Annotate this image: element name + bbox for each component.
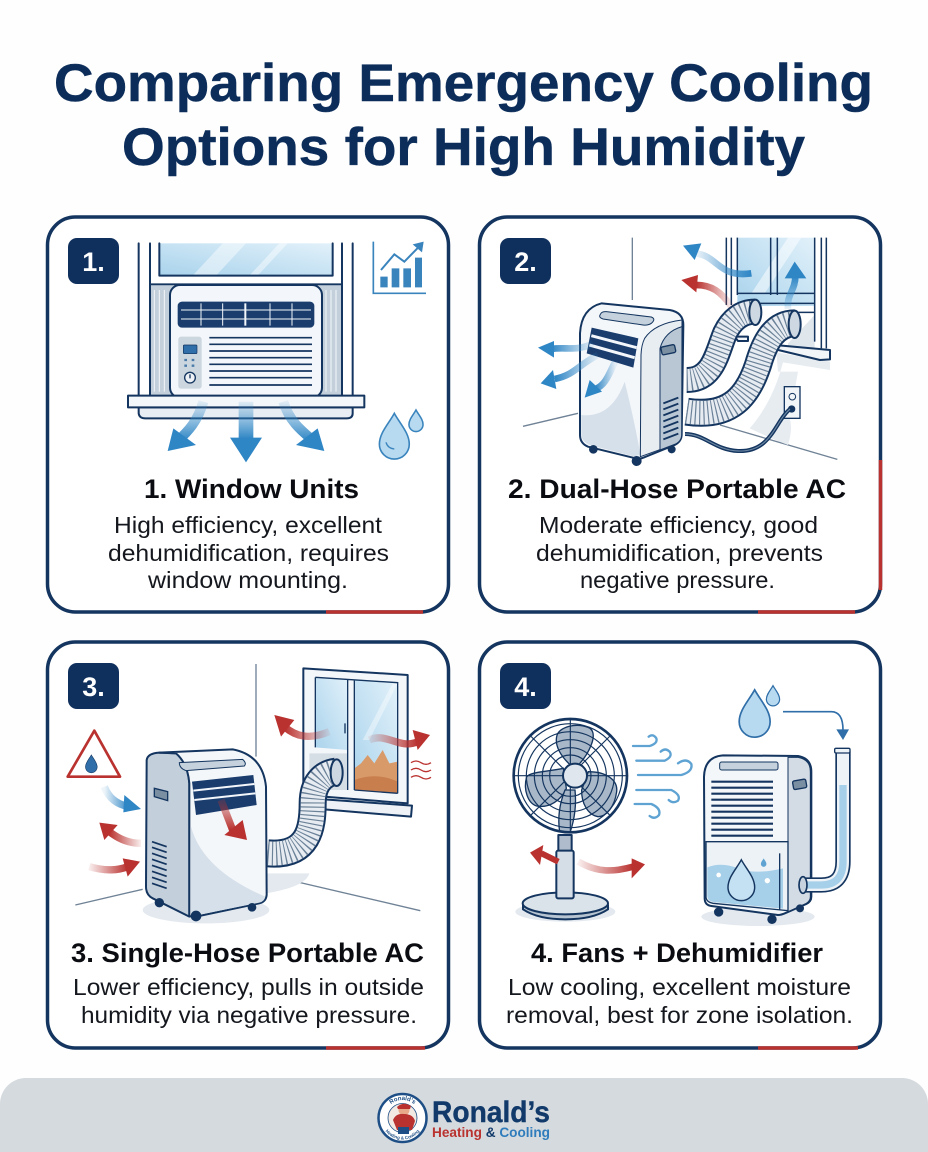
description: window mounting. bbox=[147, 567, 348, 593]
number badge 2 bbox=[500, 238, 551, 284]
oscillation arrows bbox=[530, 845, 645, 878]
heading: 2. Dual-Hose Portable AC bbox=[508, 474, 846, 504]
description: removal, best for zone isolation. bbox=[506, 1002, 853, 1028]
description: humidity via negative pressure. bbox=[81, 1002, 417, 1028]
card frame bbox=[480, 217, 880, 612]
icon: humidity warning bbox=[68, 731, 120, 777]
number badge 2: 2. bbox=[514, 247, 537, 277]
logo badge: Heating & Cooling bbox=[386, 1129, 420, 1140]
description: Low cooling, excellent moisture bbox=[508, 974, 851, 1000]
number badge 4 bbox=[500, 663, 551, 709]
body bbox=[701, 755, 815, 926]
outlet and cord bbox=[685, 387, 800, 451]
heading: 3. Single-Hose Portable AC bbox=[71, 938, 424, 968]
illustration: dehumidifier bbox=[701, 686, 850, 926]
wind lines bbox=[633, 735, 692, 818]
logo wordmark: Ronald’s bbox=[432, 1096, 550, 1129]
unit body bbox=[580, 303, 683, 466]
description bbox=[108, 512, 389, 593]
front hose bbox=[687, 311, 801, 413]
fan blades bbox=[525, 725, 617, 832]
top vent bbox=[178, 302, 314, 328]
arrows: cold air down bbox=[168, 402, 324, 462]
footer bar bbox=[0, 1078, 928, 1152]
card frame bbox=[48, 217, 448, 612]
panel: dual-hose portable AC bbox=[480, 217, 880, 612]
heat waves bbox=[411, 761, 431, 779]
card frame bbox=[48, 642, 448, 1048]
arrows: airflow bbox=[551, 253, 795, 389]
fan stand bbox=[515, 835, 615, 922]
back hose bbox=[687, 300, 761, 380]
title: Options for High Humidity bbox=[122, 118, 806, 177]
control panel bbox=[178, 337, 202, 389]
heading: 4. Fans + Dehumidifier bbox=[531, 938, 823, 968]
window bbox=[726, 238, 830, 360]
number badge 3 bbox=[68, 663, 119, 709]
number badge 3: 3. bbox=[82, 672, 105, 702]
description: dehumidification, requires bbox=[108, 540, 389, 566]
number badge 1 bbox=[68, 238, 119, 284]
fan hub bbox=[563, 764, 587, 788]
card frame bbox=[480, 642, 880, 1048]
arrows: airflow bbox=[89, 727, 418, 870]
icon: water drops bbox=[379, 410, 423, 459]
sill bbox=[128, 396, 364, 418]
panel: fans plus dehumidifier bbox=[480, 642, 880, 1048]
description: High efficiency, excellent bbox=[114, 512, 382, 538]
unit body bbox=[143, 749, 309, 923]
number badge 4: 4. bbox=[514, 672, 537, 702]
front grill bbox=[209, 338, 312, 385]
number badge 1: 1. bbox=[82, 247, 105, 277]
illustration: pedestal fan bbox=[513, 718, 692, 922]
illustration: window unit air conditioner bbox=[128, 243, 364, 462]
title bbox=[54, 54, 873, 177]
panel: window units bbox=[48, 217, 448, 612]
description: Lower efficiency, pulls in outside bbox=[73, 974, 424, 1000]
drain tube bbox=[799, 748, 850, 893]
description bbox=[536, 512, 823, 593]
logo badge bbox=[377, 1092, 428, 1144]
description: dehumidification, prevents bbox=[536, 540, 823, 566]
panel: single-hose portable AC bbox=[48, 642, 448, 1048]
icon: water drops with drain arrow bbox=[739, 686, 849, 740]
heading: 1. Window Units bbox=[144, 474, 359, 504]
description bbox=[506, 974, 853, 1028]
description: negative pressure. bbox=[580, 567, 775, 593]
logo badge: Ronald's bbox=[389, 1096, 416, 1104]
window frame and glass bbox=[139, 243, 353, 397]
icon: efficiency chart bbox=[373, 242, 426, 293]
wall and floor lines bbox=[75, 664, 420, 911]
unit body bbox=[170, 285, 322, 398]
window with hot outdoor view bbox=[303, 668, 412, 817]
logo wordmark: Heating & Cooling bbox=[432, 1124, 550, 1140]
illustration: single-hose unit bbox=[68, 664, 431, 923]
illustration: dual-hose unit bbox=[523, 238, 837, 466]
hose bbox=[268, 759, 343, 854]
fan cage bbox=[513, 718, 628, 833]
wall and floor lines bbox=[523, 238, 837, 459]
water tank bbox=[706, 842, 788, 911]
hose and sill shadow bbox=[750, 352, 830, 445]
description: Moderate efficiency, good bbox=[539, 512, 818, 538]
wheels bbox=[714, 904, 804, 924]
title: Comparing Emergency Cooling bbox=[54, 54, 873, 113]
description bbox=[73, 974, 424, 1028]
